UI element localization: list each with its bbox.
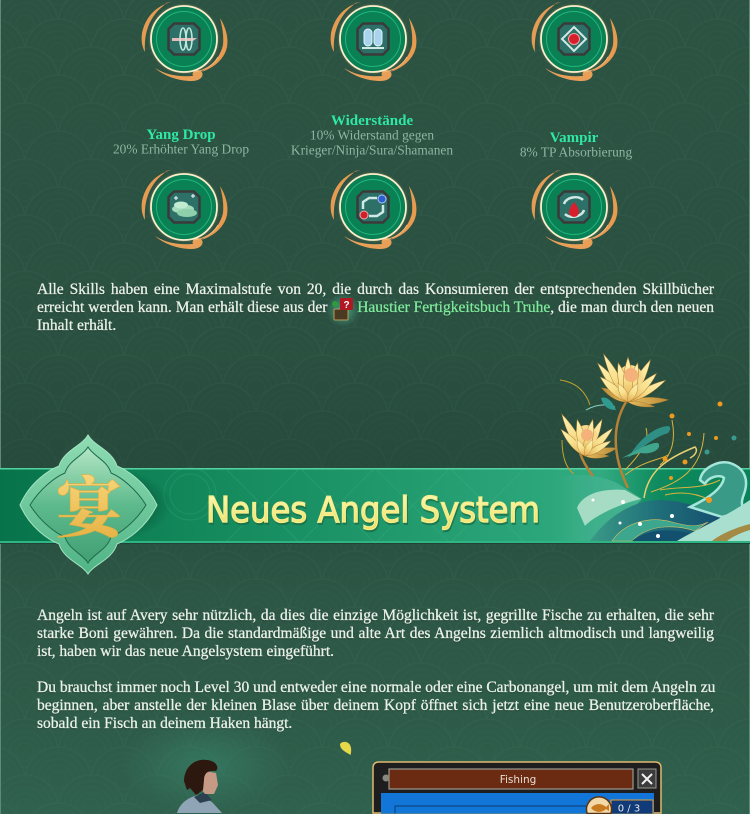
text block: skills paragraph: Alle Skills haben eine Maximalstufe von 20, die durch das Konsumieren der entsprechenden Skillbücher — [37, 281, 714, 298]
icon: skill coin yang — [142, 169, 227, 249]
heading: Vampir: Vampir — [550, 130, 599, 146]
banner lattice pattern — [164, 468, 525, 543]
heading: Vampir: 8% TP Absorbierung — [520, 144, 632, 160]
banner title: Neues Angel System — [206, 490, 540, 531]
heading: Widerstände — [291, 113, 453, 158]
pale foam — [677, 500, 750, 541]
heading: Yang Drop: Yang Drop — [146, 127, 216, 143]
heading: Yang Drop — [113, 127, 249, 156]
medallion emblem: 宴 — [56, 455, 127, 550]
text block: skills paragraph — [37, 281, 714, 334]
text block: fishing intro paragraph: Angeln ist auf Avery sehr nützlich, da dies die einzige Möglichkeit ist, gegrillte Fische zu erhalten, die sehr — [37, 607, 714, 624]
text block: fishing requirements paragraph: beginnen, aber anstelle der kleinen Blase über deinem Kopf öffnet sich jetzt eine neue Benutzeroberfläche, — [37, 697, 714, 714]
medallion emblem — [20, 435, 172, 574]
text block: skills paragraph: erreicht werden kann. Man erhält diese aus der Haustier Fertigkeitsbuch Truhe, die man durch den neuen — [37, 299, 714, 316]
white dots — [592, 498, 674, 538]
icon: skill coin sword — [142, 1, 227, 81]
text block: fishing intro paragraph: ist, haben wir das neue Angelsystem eingeführt. — [37, 643, 334, 660]
icon: skill book chest — [326, 293, 360, 327]
text block: fishing requirements paragraph: sobald ein Fisch an deinem Haken hängt. — [37, 715, 292, 732]
crest wave — [690, 462, 748, 517]
large chrysanthemum — [594, 352, 669, 409]
banner: Neues Angel System — [0, 468, 750, 544]
heading: Vampir — [520, 130, 632, 160]
icon: skill book chest: ? — [343, 300, 350, 311]
dark wave — [590, 500, 725, 541]
icon: yellow leaf — [340, 742, 351, 755]
game character — [120, 715, 290, 813]
heading: Widerstände: 10% Widerstand gegen — [310, 128, 434, 142]
text block: fishing intro paragraph: starke Boni gewähren. Da die standardmäßige und alte Art des Angelns ziemlich altmodisch und langweilig — [37, 625, 714, 642]
icon: skill coin resistances — [331, 169, 416, 249]
game window: Fishing: Fishing — [500, 774, 536, 786]
leaves — [628, 426, 670, 458]
text block: fishing intro paragraph — [37, 607, 714, 660]
hill — [555, 475, 642, 541]
icon: skill coin vampire — [532, 169, 617, 249]
small chrysanthemum — [558, 412, 618, 459]
heading: Widerstände: Krieger/Ninja/Sura/Shamanen — [291, 142, 453, 158]
icon: skill coin red gem — [532, 1, 617, 81]
text block: fishing requirements paragraph: Du brauchst immer noch Level 30 und entweder eine normale oder eine Carbonangel, um mit dem Angeln zu — [37, 679, 715, 696]
game window: Fishing — [373, 762, 661, 814]
stems and tendrils — [560, 380, 720, 500]
banner title shadow: Neues Angel System — [207, 492, 541, 533]
heading: Yang Drop: 20% Erhöhter Yang Drop — [113, 142, 249, 156]
text block: fishing requirements paragraph — [36, 679, 716, 732]
orange dots — [662, 402, 722, 503]
illustration: waves and chrysanthemums — [555, 352, 750, 541]
text block: skills paragraph: Inhalt erhält. — [37, 317, 116, 334]
icon: skill coin shield — [331, 1, 416, 81]
heading: Widerstände: Widerstände — [331, 113, 413, 129]
